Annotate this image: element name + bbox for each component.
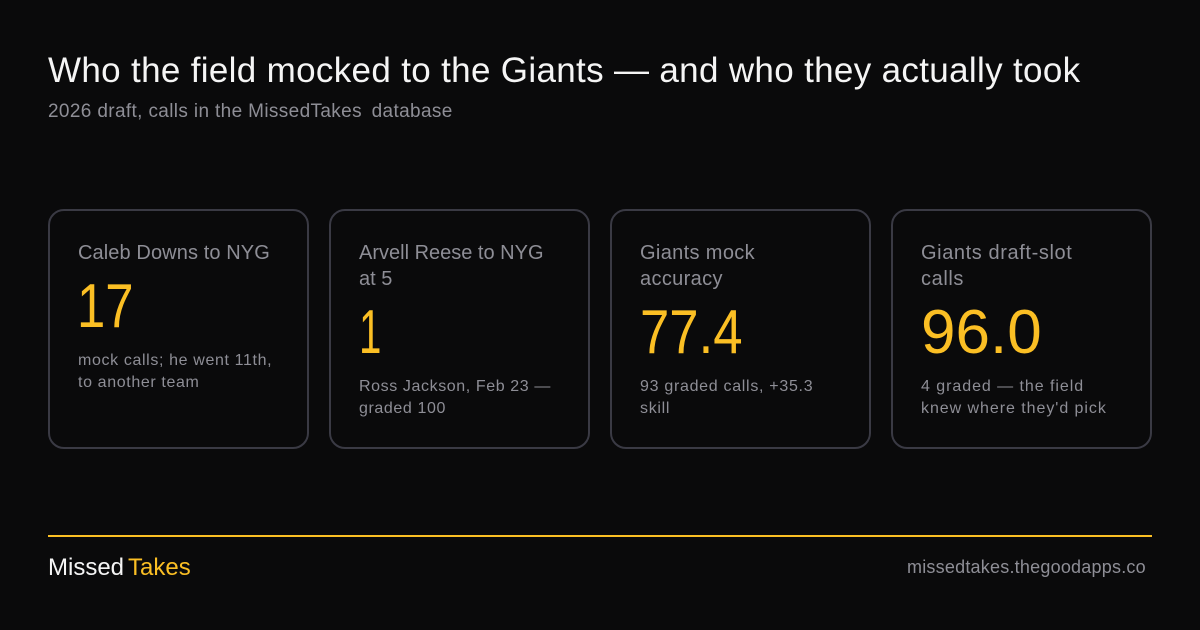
brand wordmark: MissedTakes [48, 554, 191, 581]
card note: mock calls; he went 11th, [78, 352, 272, 369]
card label: Giants mock [640, 242, 755, 264]
panel: Giants mock accuracy [610, 209, 871, 449]
card number: 77.4 [640, 298, 743, 367]
card note: graded 100 [359, 400, 446, 417]
card note: knew where they'd pick [921, 400, 1107, 417]
footer rule [48, 535, 1152, 537]
card number: 17 [77, 272, 134, 341]
card label: at 5 [359, 268, 392, 290]
panel: Giants draft-slot calls [891, 209, 1152, 449]
subtitle: 2026 draft, calls in the MissedTakes database [48, 101, 453, 122]
card note: to another team [78, 374, 200, 391]
card note: 4 graded — the field [921, 378, 1084, 395]
title: Who the field mocked to the Giants — and who they actually took [48, 51, 1080, 90]
card note [359, 378, 551, 417]
card label: Caleb Downs to NYG [78, 242, 270, 264]
card label [359, 242, 544, 290]
card number: 96.0 [921, 298, 1042, 367]
panel: Arvell Reese [329, 209, 590, 449]
card label: accuracy [640, 268, 723, 290]
card number: 1 [359, 298, 381, 367]
card label: calls [921, 268, 964, 290]
card note [921, 378, 1107, 417]
card note: skill [640, 400, 670, 417]
card note: Ross Jackson, Feb 23 — [359, 378, 551, 395]
card label [640, 242, 755, 290]
card note [78, 352, 272, 391]
card label: Giants draft-slot [921, 242, 1072, 264]
card label: Arvell Reese to NYG [359, 242, 544, 264]
panel: Caleb Downs [48, 209, 309, 449]
card note [640, 378, 813, 417]
card note: 93 graded calls, +35.3 [640, 378, 813, 395]
site url: missedtakes.thegoodapps.co [907, 557, 1146, 577]
card label [921, 242, 1072, 290]
